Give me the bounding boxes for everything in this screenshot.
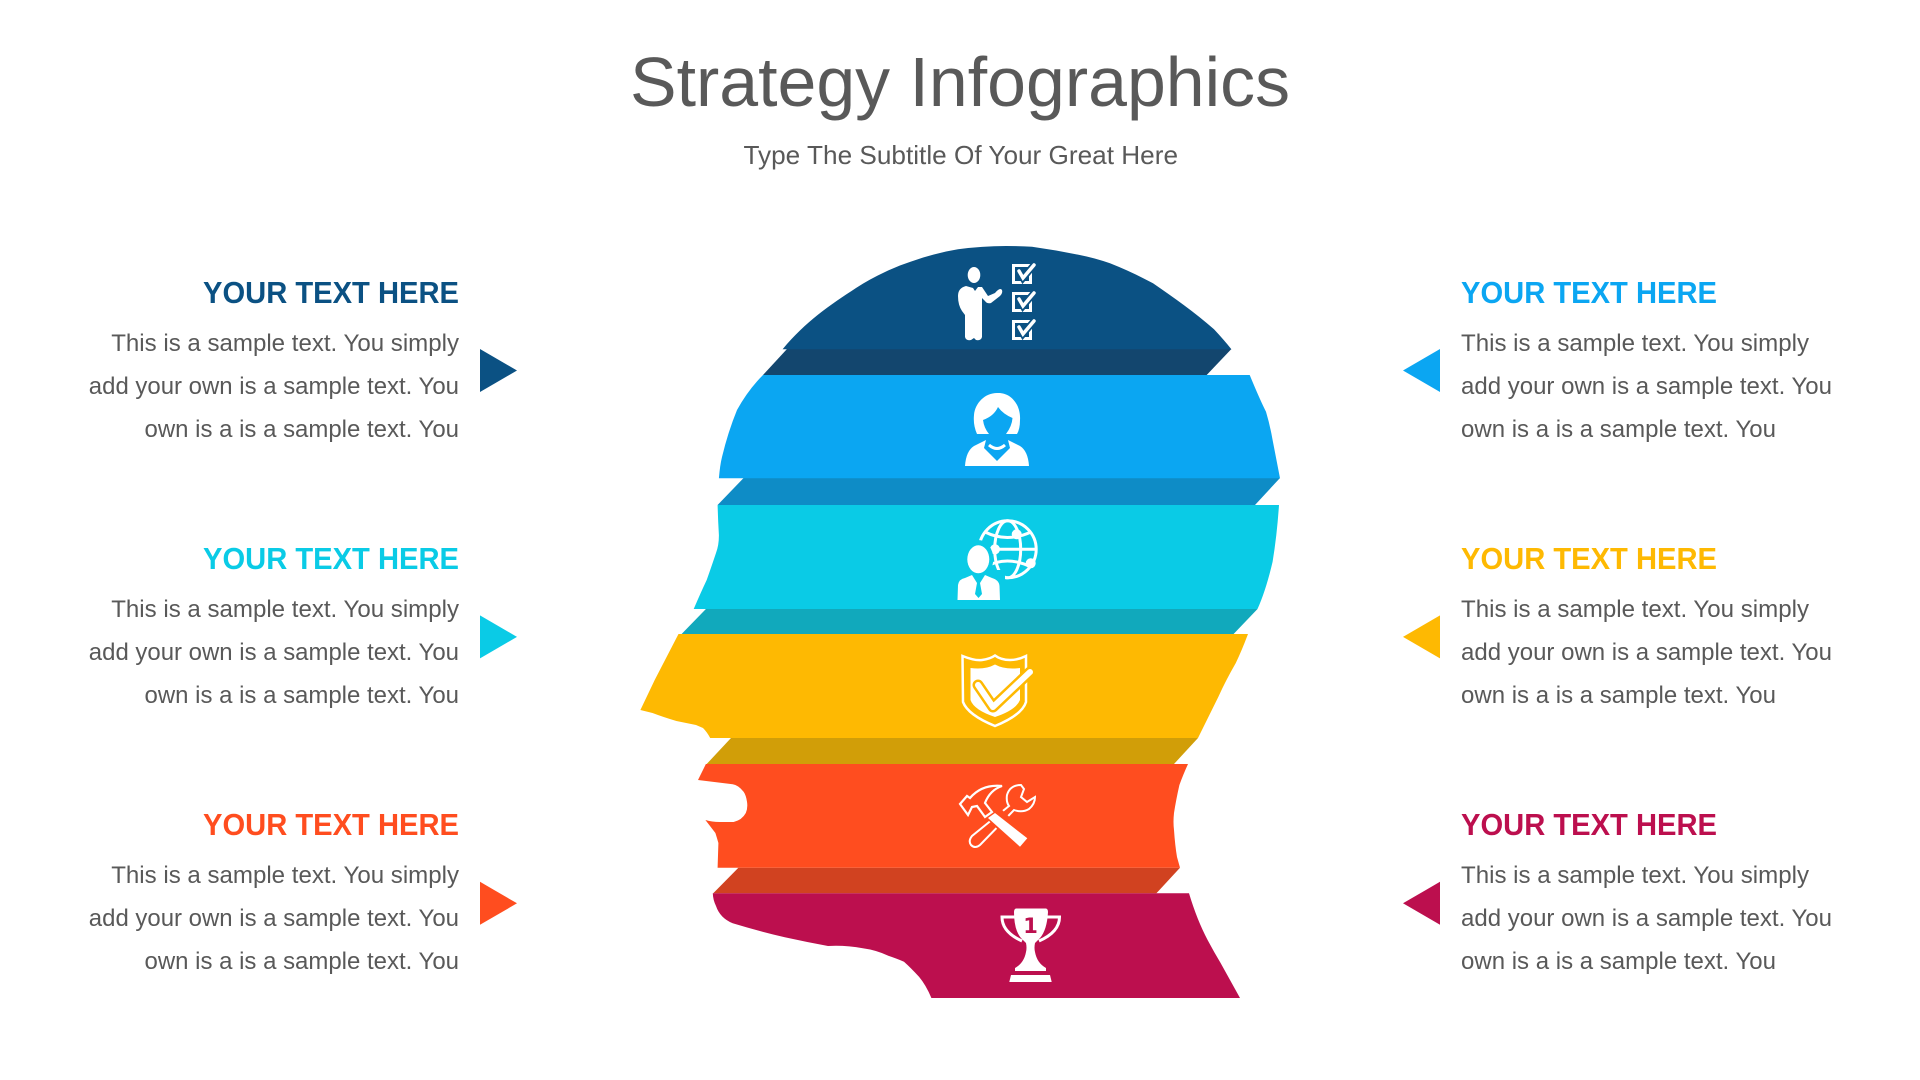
band 2 blue (719, 375, 1280, 478)
icon: shield with check (962, 656, 1030, 726)
body text (1461, 862, 1832, 975)
body text: This is a sample text. You simply (1461, 862, 1810, 889)
arrow (480, 349, 517, 392)
heading: YOUR TEXT HERE (203, 541, 459, 576)
panel: right item 2 (1403, 541, 1832, 709)
body text: add your own is a sample text. You (1461, 639, 1832, 666)
body text: This is a sample text. You simply (1461, 330, 1810, 357)
icon: hammer and wrench (960, 785, 1035, 847)
body text: This is a sample text. You simply (111, 330, 460, 357)
body text (89, 330, 460, 443)
body text: own is a is a sample text. You (1461, 682, 1776, 709)
body text: own is a is a sample text. You (144, 682, 459, 709)
panel: right item 3 (1403, 807, 1832, 975)
body text (89, 596, 460, 709)
icon: woman portrait (965, 393, 1029, 466)
body text: add your own is a sample text. You (1461, 373, 1832, 400)
band 3 cyan (694, 505, 1279, 609)
band 4 connector (707, 738, 1198, 764)
body text: add your own is a sample text. You (89, 905, 459, 932)
arrow (1403, 349, 1440, 392)
band 1 dark blue dome (783, 246, 1231, 349)
arrow (480, 615, 517, 658)
body text: own is a is a sample text. You (144, 416, 459, 443)
body text: This is a sample text. You simply (111, 862, 460, 889)
heading: YOUR TEXT HERE (203, 275, 459, 310)
band 5 orange (698, 764, 1188, 868)
title: Strategy Infographics (630, 43, 1290, 121)
panel: left item 1 (89, 275, 517, 443)
body text: add your own is a sample text. You (89, 639, 459, 666)
body text: This is a sample text. You simply (111, 596, 460, 623)
subtitle: Type The Subtitle Of Your Great Here (744, 140, 1178, 170)
arrow (1403, 615, 1440, 658)
icon: presenter with checklist (958, 265, 1034, 340)
band 6 crimson (713, 893, 1240, 998)
heading: YOUR TEXT HERE (1461, 541, 1717, 576)
band 1 connector (763, 349, 1231, 375)
heading: YOUR TEXT HERE (1461, 807, 1717, 842)
heading: YOUR TEXT HERE (203, 807, 459, 842)
panel: left item 3 (89, 807, 517, 975)
panel: right item 1 (1403, 275, 1832, 443)
body text: add your own is a sample text. You (1461, 905, 1832, 932)
body text (1461, 330, 1832, 443)
band 4 yellow (640, 634, 1248, 738)
body text (1461, 596, 1832, 709)
band 3 connector (682, 609, 1258, 634)
body text: add your own is a sample text. You (89, 373, 459, 400)
body text (89, 862, 460, 975)
icon: trophy (1002, 908, 1060, 982)
arrow (480, 882, 517, 925)
band 2 connector (718, 478, 1280, 505)
head silhouette (640, 246, 1280, 998)
icon: person with globe (950, 521, 1036, 605)
body text: own is a is a sample text. You (144, 948, 459, 975)
panel: left item 2 (89, 541, 517, 709)
body text: own is a is a sample text. You (1461, 416, 1776, 443)
trophy number: 1 (1023, 914, 1038, 938)
body text: This is a sample text. You simply (1461, 596, 1810, 623)
arrow (1403, 882, 1440, 925)
heading: YOUR TEXT HERE (1461, 275, 1717, 310)
body text: own is a is a sample text. You (1461, 948, 1776, 975)
band 5 connector (713, 868, 1180, 893)
